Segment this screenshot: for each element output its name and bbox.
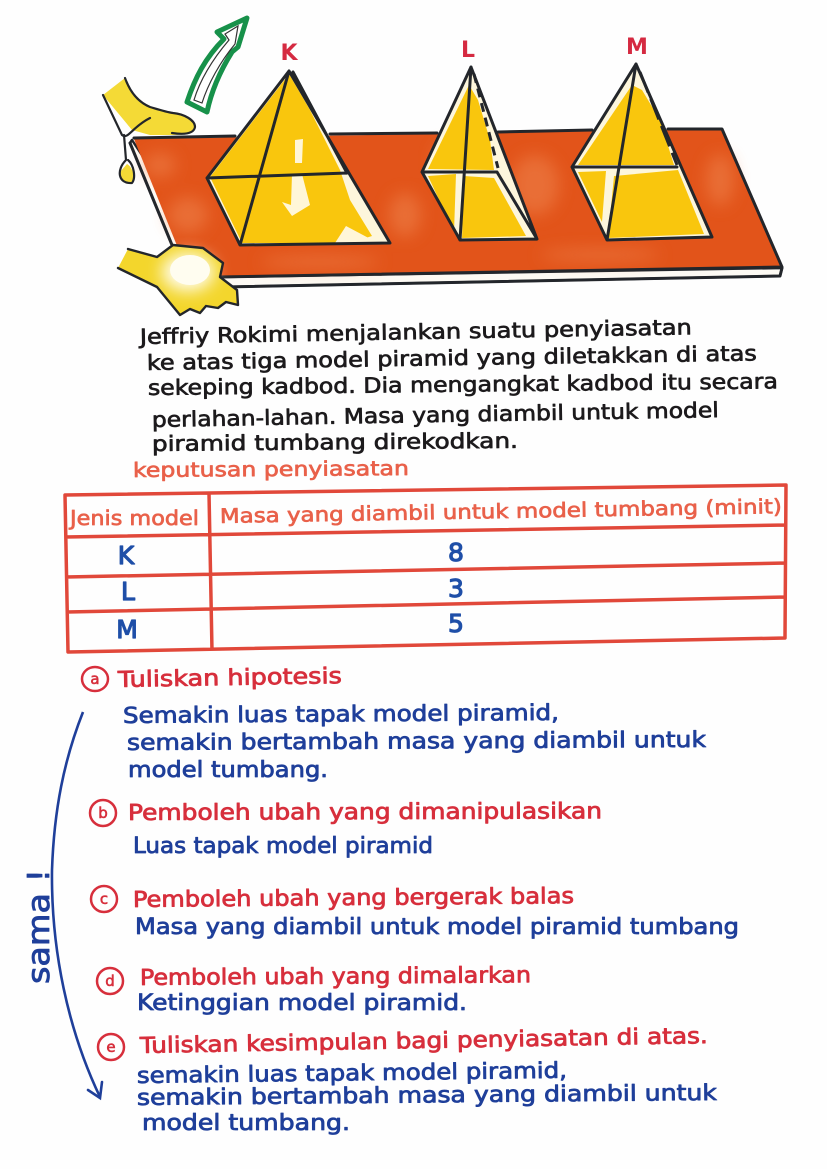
hand bottom <box>118 245 238 315</box>
arrow: lift up <box>187 18 247 112</box>
heading: keputusan penyiasatan: keputusan penyiasatan <box>133 456 409 482</box>
results table: M <box>116 615 138 644</box>
section b: manipulated variable <box>90 799 602 859</box>
section a: hypothesis: a <box>90 670 100 688</box>
section d: constant variable: Pemboleh ubah yang dimalarkan <box>140 963 531 991</box>
section a: hypothesis: model tumbang. <box>128 758 328 783</box>
pyramid labels <box>280 35 648 66</box>
section c: responding variable: Pemboleh ubah yang bergerak balas <box>133 884 574 913</box>
section a: hypothesis: Semakin luas tapak model piramid, <box>123 701 559 729</box>
intro paragraph: piramid tumbang direkodkan. <box>152 429 518 456</box>
pyramid K <box>207 71 390 245</box>
pyramid labels: K <box>280 41 298 66</box>
results table: 3 <box>448 574 464 603</box>
section a: hypothesis <box>82 664 706 783</box>
section d: constant variable: Ketinggian model piramid. <box>137 991 467 1016</box>
cardboard <box>130 129 782 287</box>
section b: manipulated variable: Luas tapak model piramid <box>133 834 433 859</box>
section c: responding variable: Masa yang diambil untuk model piramid tumbang <box>135 915 739 940</box>
section e: conclusion: semakin bertambah masa yang diambil untuk <box>137 1081 717 1111</box>
section e: conclusion: semakin luas tapak model piramid, <box>137 1059 567 1089</box>
section e: conclusion <box>98 1024 717 1136</box>
section d: constant variable: d <box>105 972 115 990</box>
section e: conclusion: e <box>106 1038 116 1056</box>
section b: manipulated variable: Pemboleh ubah yang dimanipulasikan <box>128 799 602 826</box>
section e: conclusion: model tumbang. <box>142 1111 350 1136</box>
arrow: same note: sama ! <box>22 869 57 984</box>
results table: 5 <box>448 609 464 638</box>
section c: responding variable <box>91 884 739 940</box>
section a: hypothesis: Tuliskan hipotesis <box>117 664 342 693</box>
arrow: same note <box>22 712 102 1098</box>
illustration: cardboard with three pyramid models <box>103 18 782 315</box>
section a: hypothesis: semakin bertambah masa yang diambil untuk <box>127 728 706 756</box>
results table: Jenis model <box>68 506 199 530</box>
results table: L <box>121 577 135 606</box>
pyramid labels: L <box>461 38 475 63</box>
intro paragraph: perlahan-lahan. Masa yang diambil untuk model <box>152 398 719 432</box>
pyramid L <box>422 67 537 240</box>
intro paragraph: Jeffriy Rokimi menjalankan suatu penyiasatan <box>137 315 692 349</box>
results table: K <box>118 541 135 570</box>
hand top <box>103 78 195 183</box>
intro paragraph: ke atas tiga model piramid yang diletakkan di atas <box>147 341 757 375</box>
section c: responding variable: c <box>100 890 108 908</box>
results table <box>65 485 786 652</box>
intro paragraph <box>137 315 778 456</box>
pyramid M <box>572 64 712 240</box>
section d: constant variable <box>97 963 531 1016</box>
results table: Masa yang diambil untuk model tumbang (minit) <box>220 494 782 528</box>
section e: conclusion: Tuliskan kesimpulan bagi penyiasatan di atas. <box>139 1024 708 1059</box>
results table: 8 <box>448 538 464 567</box>
section b: manipulated variable: b <box>98 804 108 822</box>
intro paragraph: sekeping kadbod. Dia mengangkat kadbod itu secara <box>148 369 778 400</box>
pyramid labels: M <box>626 35 648 60</box>
